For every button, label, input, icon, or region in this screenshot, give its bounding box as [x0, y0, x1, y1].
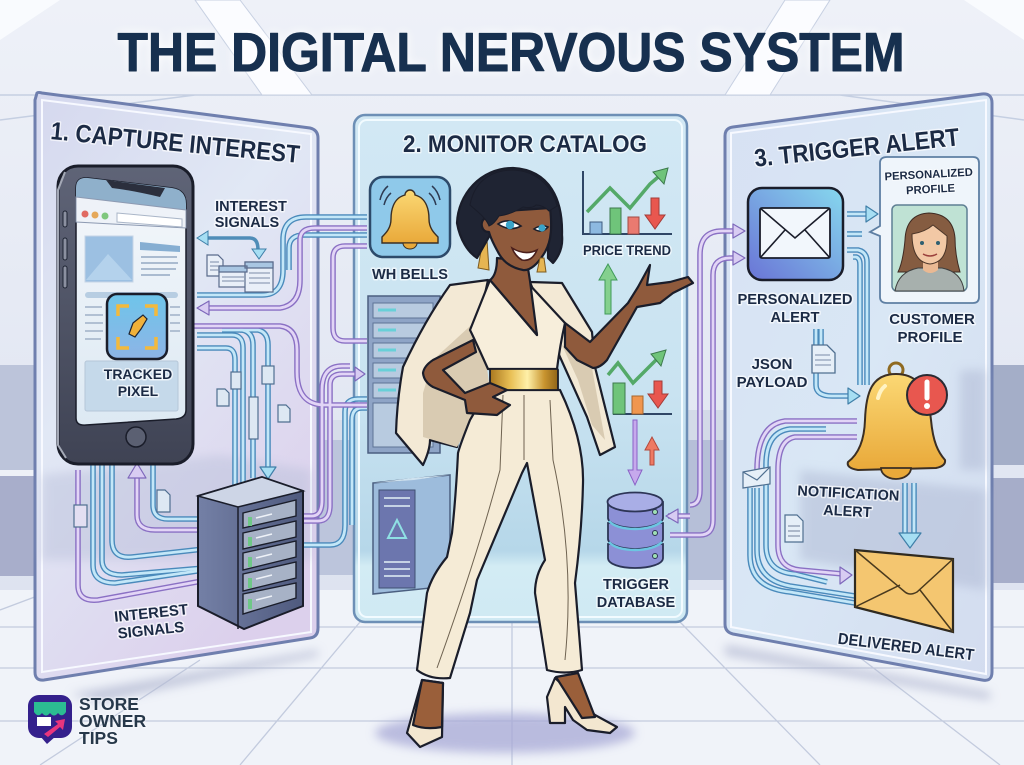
- trigger database label: DATABASE: [597, 595, 676, 611]
- arrow: purple down: [628, 420, 642, 485]
- icon: notification bell: [848, 363, 947, 479]
- chart: price trend: [583, 168, 672, 234]
- personalized alert label: ALERT: [771, 310, 819, 326]
- legs: [417, 390, 583, 678]
- panel: 2. monitor catalog: [354, 115, 687, 622]
- eyes: [498, 221, 521, 229]
- neck and chest skin: [490, 258, 537, 335]
- icon: json document: [812, 345, 835, 373]
- icon: interest signal two-way arrow: [197, 231, 266, 259]
- chart: second trend: [608, 350, 672, 414]
- logo wordmark: STORE: [79, 694, 139, 714]
- tracked pixel label: PIXEL: [118, 383, 159, 399]
- cape, right side: [530, 282, 615, 455]
- connector pipes: [78, 214, 914, 603]
- face: [482, 208, 551, 270]
- interest signals label, top: INTEREST: [215, 199, 287, 215]
- customer portrait: [892, 205, 967, 291]
- icon: wh bells tile: [370, 177, 450, 257]
- cape lining, right: [562, 345, 605, 440]
- personalized alert label: PERSONALIZED: [737, 292, 853, 308]
- notification alert label: NOTIFICATION: [797, 483, 900, 505]
- heading: 1. capture interest: 1. CAPTURE INTEREST: [49, 117, 301, 169]
- phone screen: [76, 178, 186, 425]
- left arm on hip: [423, 340, 510, 415]
- trouser creases: [437, 395, 568, 668]
- interest signals label, bottom: INTEREST: [113, 601, 189, 626]
- arrow: red up: [645, 437, 659, 465]
- smile: [512, 248, 537, 260]
- card title: PERSONALIZED: [884, 167, 973, 183]
- heading: 2. monitor catalog: 2. MONITOR CATALOG: [403, 131, 647, 158]
- card title: PROFILE: [906, 183, 956, 197]
- tower computer: [373, 475, 450, 594]
- cape lining, left: [423, 317, 490, 447]
- tracked pixel label: TRACKED: [104, 366, 172, 382]
- customer profile label: PROFILE: [897, 329, 963, 346]
- right arm and hand: [565, 265, 693, 368]
- earring, right: [537, 258, 546, 272]
- delivered alert label: DELIVERED ALERT: [837, 631, 975, 664]
- customer profile label: CUSTOMER: [889, 311, 975, 328]
- trigger database label: TRIGGER: [603, 577, 670, 593]
- left foot and shoe: [407, 680, 443, 747]
- wh bells label: WH BELLS: [372, 266, 448, 283]
- alert badge: [907, 375, 947, 415]
- panel floor shadows: [70, 650, 318, 702]
- panel: 1. capture interest: [35, 92, 318, 680]
- server behind figure: [368, 296, 440, 453]
- server rack: [198, 477, 303, 629]
- customer profile card: [870, 157, 979, 303]
- icon: delivered alert envelope: [855, 550, 953, 632]
- logo icon: [28, 695, 72, 744]
- json payload label: PAYLOAD: [737, 374, 808, 391]
- panel 3 desk and monitor showing through: [800, 370, 986, 590]
- icon: personalized alert envelope tile: [748, 188, 843, 280]
- interest signals label, bottom: SIGNALS: [117, 619, 185, 643]
- hair fringe: [470, 170, 557, 226]
- belt: [490, 369, 558, 390]
- json payload label: JSON: [752, 356, 792, 373]
- panel 1 desk showing through: [42, 455, 311, 560]
- logo: store owner tips: [28, 694, 146, 748]
- price trend label: PRICE TREND: [583, 242, 671, 258]
- icon: envelope packet and document on pipes: [743, 467, 803, 542]
- small packets on panel 1 pipes: [74, 366, 290, 527]
- arrowheads on pipes: [128, 206, 921, 588]
- woman presenter figure: [396, 168, 693, 747]
- logo wordmark: TIPS: [79, 728, 118, 748]
- phone home button: [126, 427, 146, 447]
- icon: signal documents: [207, 255, 273, 292]
- heading: 3. trigger alert: 3. TRIGGER ALERT: [753, 123, 961, 173]
- notification alert label: ALERT: [823, 503, 872, 521]
- cape, left side: [396, 280, 488, 465]
- earring, left: [478, 240, 489, 270]
- icon: trigger database: [608, 492, 663, 568]
- icon: tracked pixel: [107, 294, 167, 359]
- arrow: green up: [599, 264, 617, 314]
- logo wordmark: OWNER: [79, 711, 146, 731]
- phone with browser: [58, 166, 193, 464]
- title: THE DIGITAL NERVOUS SYSTEM: [118, 21, 904, 83]
- right foot and shoe: [547, 673, 617, 733]
- hair back: [457, 168, 562, 263]
- torso: [470, 280, 565, 369]
- interest signals label, top: SIGNALS: [215, 215, 280, 231]
- panel: 3. trigger alert: [725, 94, 992, 680]
